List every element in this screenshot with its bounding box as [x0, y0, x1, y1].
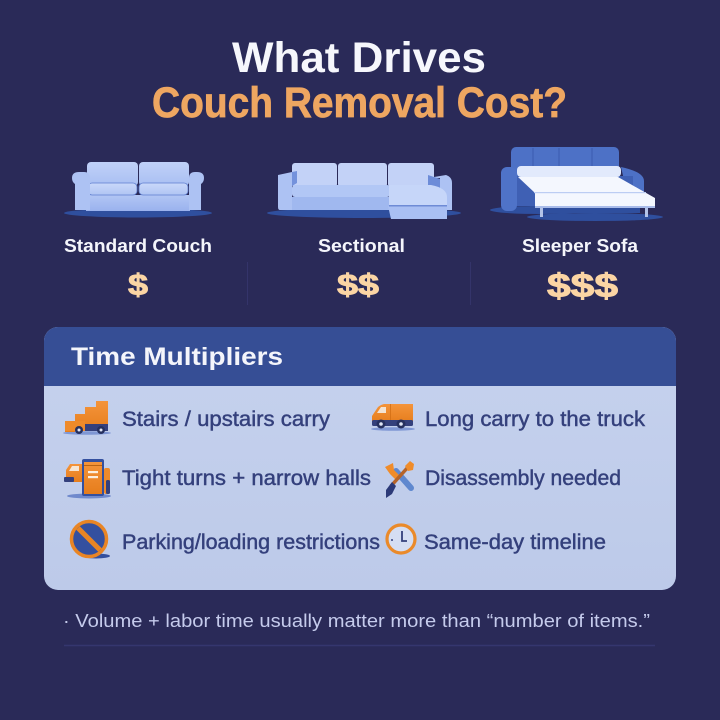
icon: sectional	[267, 163, 461, 219]
icon: sleeper sofa	[490, 147, 663, 221]
column: standard couch	[64, 162, 212, 302]
price: $$$	[547, 267, 618, 304]
price: $$	[337, 269, 379, 302]
text: Stairs / upstairs carry	[122, 408, 331, 431]
label: Sectional	[318, 236, 405, 256]
icon: no parking sign	[72, 522, 110, 558]
item: disassembly	[385, 461, 621, 498]
item: tight turns	[64, 459, 371, 498]
panel: time multipliers	[44, 327, 676, 590]
label: Sleeper Sofa	[522, 236, 639, 256]
icon: standard couch	[64, 162, 212, 218]
icon: clock	[387, 525, 415, 553]
text: Long carry to the truck	[425, 408, 646, 431]
icon: truck in narrow hall	[64, 459, 111, 498]
footnote: · Volume + labor time usually matter more than “number of items.”	[63, 611, 650, 631]
item: same-day	[387, 525, 606, 554]
panel body	[44, 327, 676, 590]
column: sleeper sofa	[490, 147, 663, 304]
item: long carry	[371, 404, 646, 431]
price: $	[128, 269, 148, 302]
title	[152, 34, 567, 127]
text: Tight turns + narrow halls	[122, 467, 371, 490]
text: Disassembly needed	[425, 467, 621, 490]
text: Parking/loading restrictions	[122, 531, 380, 554]
title: What Drives	[232, 34, 486, 82]
icon: stairs truck	[63, 401, 111, 435]
text: Same-day timeline	[424, 531, 606, 554]
panel header	[44, 327, 676, 386]
item: parking	[72, 522, 380, 558]
icon: delivery van	[371, 404, 415, 431]
column: sectional	[267, 163, 461, 302]
title: Couch Removal Cost?	[152, 79, 567, 127]
icon: crossed tools	[385, 461, 414, 498]
item: stairs	[63, 401, 331, 435]
label: Standard Couch	[64, 236, 212, 256]
panel heading: Time Multipliers	[71, 343, 283, 371]
